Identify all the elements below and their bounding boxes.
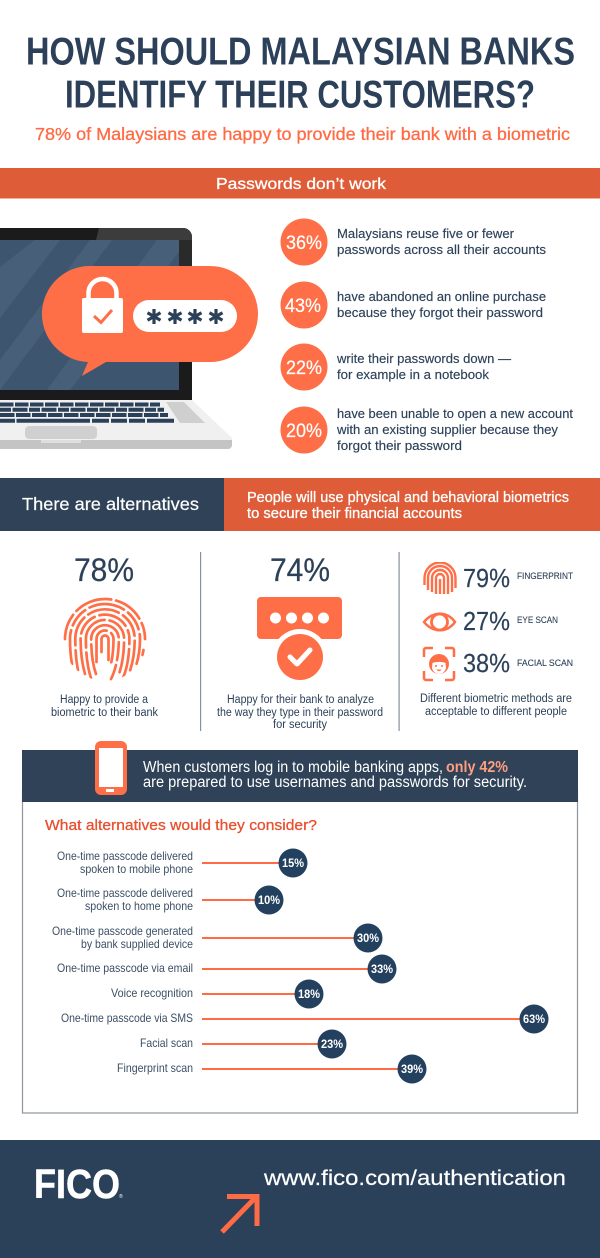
row: facial scan 38%: 38% [463,648,510,678]
row: bank supplied device 30% [52,924,382,952]
arrow icon [222,1196,257,1232]
mobile login banner: only 42% [446,759,508,776]
row: facial scan 23%: 23% [321,1039,343,1051]
column: 78% happy to provide a biometric: Happy to provide a [60,694,149,706]
section banner: passwords don't work: Passwords don’t work [216,176,387,193]
row: SMS 63% [61,1004,548,1034]
row: spoken to mobile phone 15%: One-time passcode delivered [57,849,193,863]
stat: 20% [280,406,573,454]
column: 78% happy to provide a biometric: 78% [74,552,134,588]
icon: mobile phone [95,741,127,795]
row: eye scan 27%: EYE SCAN [517,615,558,625]
banner: there are alternatives: There are alternatives [22,494,199,514]
mobile login banner: When customers log in to mobile banking apps, [143,759,443,776]
row: facial scan 38%: FACIAL SCAN [517,658,573,668]
FICO logo: ® [119,1193,123,1200]
title [26,30,575,116]
row: spoken to home phone 10%: One-time passcode delivered [57,886,193,900]
stat: 20%: with an existing supplier because they [336,422,558,437]
row: spoken to mobile phone 15% [57,848,308,878]
stat: 36%: 36% [286,232,322,254]
password field [133,300,237,332]
row: eye scan 27% [424,606,558,636]
row: SMS 63%: 63% [523,1014,545,1026]
stat: 36%: passwords across all their accounts [337,242,547,257]
mobile banking panel outline [22,790,578,1113]
stat: 20%: forgot their password [337,438,462,453]
row: spoken to home phone 10%: 10% [258,895,280,907]
column: 74% typing analysis: for security [273,719,327,731]
stat: 36% [280,218,547,266]
column: 78% happy to provide a biometric: biometric to their bank [51,707,158,719]
lock icon [82,279,123,333]
stat: 22% [280,344,511,390]
row: spoken to mobile phone 15%: spoken to mobile phone [80,862,193,876]
website url: www.fico.com/authentication [263,1166,566,1190]
subtitle: 78% of Malaysians are happy to provide their bank with a biometric [35,124,570,144]
stat: 22%: for example in a notebook [337,367,489,382]
column: 74% typing analysis: the way they type in their password [217,707,383,719]
row: voice recognition 18%: Voice recognition [111,986,193,1000]
row: SMS 63%: One-time passcode via SMS [61,1011,193,1025]
footer [0,1140,600,1258]
laptop base and keyboard [0,400,232,449]
row: bank supplied device 30%: 30% [357,933,379,945]
banner: physical and behavioral biometrics: to secure their financial accounts [247,506,462,522]
row: facial scan 23%: Facial scan [140,1036,193,1050]
mobile login banner [22,741,578,802]
stat: 43%: because they forgot their password [337,305,543,320]
stat: 22%: 22% [286,357,322,379]
banner: there are alternatives [0,478,224,531]
column: 74% typing analysis: 74% [270,552,330,588]
column: 78% happy to provide a biometric [51,552,158,719]
banner: physical and behavioral biometrics: People will use physical and behavioral biometrics [247,490,569,506]
row: spoken to mobile phone 15%: 15% [282,858,304,870]
column: biometric methods: acceptable to different people [425,706,567,718]
column: biometric methods [420,562,573,718]
column: 74% typing analysis [217,552,383,731]
row: email 33%: 33% [371,964,393,976]
stat: 20%: have been unable to open a new account [337,406,573,421]
row: spoken to home phone 10%: spoken to home phone [85,899,193,913]
laptop illustration [0,228,258,449]
banner: physical and behavioral biometrics [224,478,600,531]
row: fingerprint 79% [424,562,573,594]
row: bank supplied device 30%: by bank supplied device [81,937,193,951]
row: fingerprint scan 39% [117,1054,426,1084]
row: fingerprint scan 39%: Fingerprint scan [117,1061,193,1075]
row: facial scan 38% [424,648,573,680]
laptop lid [0,228,192,400]
column: 74% typing analysis: Happy for their bank to analyze [227,694,374,706]
stat: 22%: write their passwords down — [336,351,511,366]
row: spoken to home phone 10% [57,886,284,914]
chart heading: What alternatives would they consider? [45,817,317,834]
stat: 20%: 20% [286,420,322,442]
row: fingerprint 79%: FINGERPRINT [517,571,573,581]
icon: password card with check [257,597,342,685]
stat: 36%: Malaysians reuse five or fewer [337,226,515,241]
icon: fingerprint [65,599,145,681]
row: fingerprint scan 39%: 39% [401,1064,423,1076]
stat: 43%: 43% [285,295,321,317]
speech bubble with lock and password [42,266,258,376]
row: bank supplied device 30%: One-time passcode generated [52,924,193,938]
row: eye scan 27%: 27% [463,606,510,636]
row: facial scan 23% [140,1030,346,1058]
row: fingerprint 79%: 79% [463,563,510,593]
stat: 43%: have abandoned an online purchase [337,289,546,304]
row: email 33% [57,954,396,984]
row: email 33%: One-time passcode via email [57,961,193,975]
section banner: passwords don't work [0,168,600,198]
mobile login banner: are prepared to use usernames and passwords for security. [143,774,527,791]
FICO logo: FICO [34,1161,120,1207]
row: voice recognition 18%: 18% [298,989,320,1001]
column: biometric methods: Different biometric methods are [420,693,572,705]
lollipop chart [52,848,548,1084]
stat: 43% [280,282,546,328]
row: voice recognition 18% [111,980,324,1008]
